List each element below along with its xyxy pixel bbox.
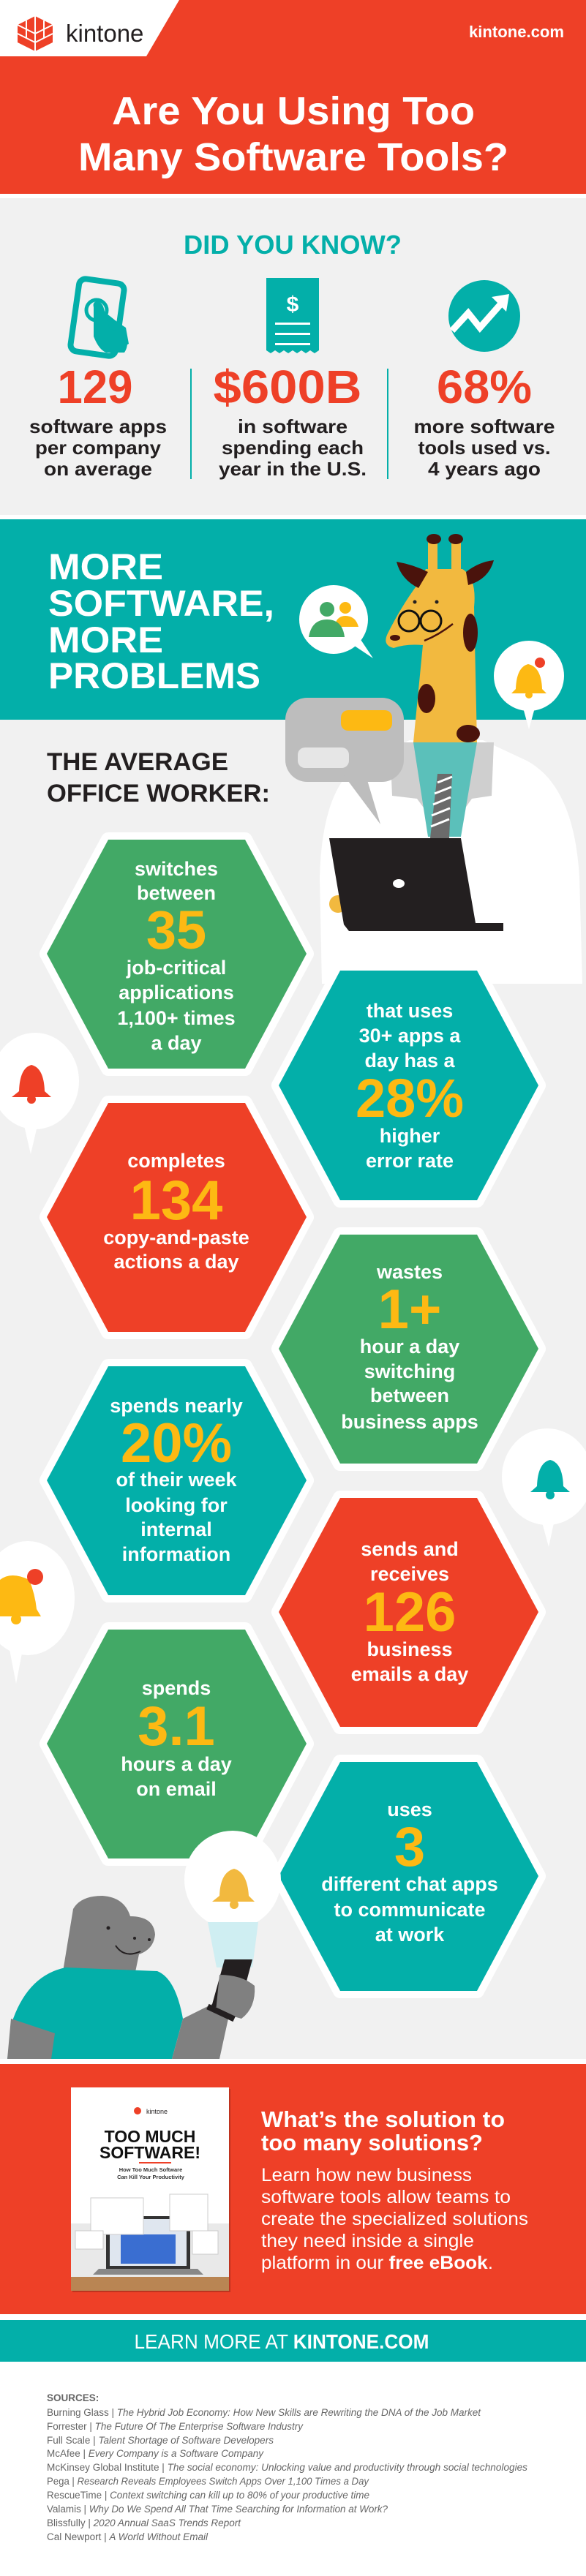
sources: RescueTime | Context switching can kill up to 80% of your productive time: [47, 2490, 369, 2501]
hex 2: 28% error: that uses: [367, 1000, 453, 1022]
logo: kintone: [18, 16, 143, 51]
illustration: giraffe office worker: [320, 534, 582, 984]
ebook cover: TOO MUCH: [105, 2127, 195, 2146]
hex 4: 1+ hour: 1+: [378, 1278, 441, 1341]
hex 8: 3 chat apps: to communicate: [334, 1899, 486, 1921]
icon: red bell bubble: [0, 1033, 79, 1154]
stat: 129 apps: per company: [35, 437, 162, 459]
hex 7: 3.1 hours: on email: [136, 1778, 217, 1800]
panel: ebook CTA: [0, 2059, 586, 2314]
heading: more software more problems: MORE: [48, 546, 163, 587]
hex 4: 1+ hour: hour a day: [360, 1336, 459, 1357]
hex 4: 1+ hour: wastes: [376, 1261, 443, 1283]
stat: 129 apps: on average: [44, 458, 152, 480]
hex 5: 20% week: spends nearly: [110, 1395, 243, 1417]
CTA body: they need inside a single: [261, 2231, 474, 2251]
hex 2: 28% error: error rate: [366, 1150, 454, 1172]
icon: bell bubble top right: [494, 641, 564, 729]
stat: $600B: year in the U.S.: [219, 458, 367, 480]
head: [60, 1896, 155, 1989]
stat: 129 apps: 129: [57, 361, 133, 413]
sources: McKinsey Global Institute | The social economy: Unlocking value and productivity through social technologies: [47, 2462, 527, 2473]
hex 2: 28% error: 28%: [356, 1068, 464, 1129]
stat: $600B: [214, 278, 367, 480]
heading: more software more problems: MORE: [48, 619, 163, 660]
hex 7: 3.1 hours: spends: [142, 1677, 211, 1699]
shirt: [7, 1967, 183, 2059]
stat: 68%: [414, 280, 555, 480]
ebook cover: Can Kill Your Productivity: [117, 2174, 185, 2180]
neck and head: [386, 569, 477, 742]
hex 1: 35 apps: between: [137, 882, 216, 904]
hex 5: 20% week: [47, 1366, 307, 1595]
sources: Cal Newport | A World Without Email: [47, 2531, 209, 2542]
heading: more software more problems: [48, 546, 274, 696]
stat: 68%: tools used vs.: [418, 437, 550, 459]
sources: SOURCES:: [47, 2392, 99, 2403]
CTA body: [261, 2165, 528, 2273]
hex 4: 1+ hour: business apps: [341, 1411, 478, 1433]
logo: kintone: kintone: [66, 20, 143, 47]
ebook cover: kintone: [146, 2108, 168, 2115]
laptop: [329, 895, 347, 913]
icon: growth chart: [448, 280, 520, 352]
title: Are You Using Too: [112, 89, 475, 133]
heading: the average office worker: OFFICE WORKER:: [47, 780, 270, 807]
hex 5: 20% week: of their week: [116, 1469, 238, 1491]
sources: Valamis | Why Do We Spend All That Time Searching for Information at Work?: [47, 2504, 388, 2515]
hex 8: 3 chat apps: uses: [387, 1799, 432, 1820]
banner: learn more: LEARN MORE AT KINTONE.COM: [135, 2330, 429, 2353]
heading: did you know: DID YOU KNOW?: [184, 230, 402, 260]
title: Many Software Tools?: [78, 135, 508, 179]
sources: McAfee | Every Company is a Software Company: [47, 2448, 264, 2459]
icon: phone tap: [70, 278, 129, 357]
hex 6: 126 emails: 126: [364, 1581, 456, 1643]
heading: more software more problems: SOFTWARE,: [48, 583, 274, 624]
CTA heading: What’s the solution to: [261, 2106, 505, 2132]
hex 5: 20% week: internal: [140, 1518, 212, 1540]
hex 7: 3.1 hours: [47, 1630, 307, 1858]
sources: [47, 2392, 527, 2542]
ebook cover: How Too Much Software: [119, 2166, 182, 2173]
icon: people speech bubble: [299, 585, 373, 658]
hex 1: 35 apps: 1,100+ times: [117, 1007, 236, 1029]
sources: Pega | Research Reveals Employees Switch Apps Over 1,100 Times a Day: [47, 2476, 369, 2487]
hex 6: 126 emails: receives: [370, 1563, 449, 1585]
header band: [0, 0, 586, 198]
sources: Burning Glass | The Hybrid Job Economy: How New Skills are Rewriting the DNA of the Job Market: [47, 2407, 481, 2418]
hex 1: 35 apps: 35: [146, 900, 206, 960]
icon: receipt: [266, 278, 319, 353]
hex 1: 35 apps: switches: [135, 858, 218, 880]
icon: yellow bell bubble left: [0, 1541, 75, 1684]
hex 7: 3.1 hours: 3.1: [138, 1695, 215, 1758]
stat: $600B: $600B: [214, 361, 361, 413]
hex 6: 126 emails: [279, 1498, 538, 1727]
icon: receipt: $: [287, 293, 299, 317]
stat: 68%: more software: [414, 415, 555, 437]
stat: 68%: 68%: [437, 361, 532, 413]
CTA heading: [261, 2106, 505, 2155]
hex 6: 126 emails: sends and: [361, 1538, 459, 1560]
stat: 129 apps: software apps: [29, 415, 167, 437]
hex 3: 134 copy paste: [47, 1103, 307, 1332]
hex 2: 28% error: 30+ apps a: [359, 1025, 461, 1047]
hex 2: 28% error: [279, 971, 538, 1200]
hex 5: 20% week: information: [122, 1543, 230, 1565]
hex 1: 35 apps: [47, 840, 307, 1069]
hex 3: 134 copy paste: copy-and-paste: [103, 1227, 249, 1249]
stat: 68%: 4 years ago: [428, 458, 541, 480]
panel: more software band: [0, 515, 586, 720]
hex 8: 3 chat apps: at work: [375, 1924, 445, 1946]
hex 4: 1+ hour: switching: [364, 1360, 455, 1382]
hex 8: 3 chat apps: [279, 1762, 538, 1991]
hex 3: 134 copy paste: completes: [127, 1150, 225, 1172]
hex 8: 3 chat apps: 3: [394, 1816, 425, 1878]
hex 4: 1+ hour: [279, 1235, 538, 1464]
CTA body: platform in our free eBook.: [261, 2253, 493, 2273]
title: [78, 89, 508, 179]
sources: Blissfully | 2020 Annual SaaS Trends Report: [47, 2517, 241, 2528]
hex 3: 134 copy paste: actions a day: [113, 1251, 239, 1273]
sources: Full Scale | Talent Shortage of Software Developers: [47, 2435, 274, 2446]
ebook cover: SOFTWARE!: [99, 2143, 200, 2162]
hex 4: 1+ hour: between: [370, 1385, 449, 1406]
stat: 129 apps: [29, 278, 167, 480]
phone and hand: [211, 1959, 252, 2008]
icon: grey chat bubble: [285, 698, 404, 824]
stat: $600B: in software: [238, 415, 348, 437]
CTA body: software tools allow teams to: [261, 2187, 511, 2207]
hex 1: 35 apps: applications: [119, 982, 234, 1003]
hex 5: 20% week: 20%: [121, 1412, 232, 1475]
hex 6: 126 emails: business: [367, 1638, 453, 1660]
CTA heading: too many solutions?: [261, 2130, 483, 2155]
CTA body: Learn how new business: [261, 2165, 472, 2185]
ebook cover: [71, 2087, 230, 2292]
stat: $600B: spending each: [222, 437, 364, 459]
heading: more software more problems: PROBLEMS: [48, 655, 260, 696]
hex 6: 126 emails: emails a day: [351, 1663, 468, 1685]
hex 5: 20% week: looking for: [125, 1494, 228, 1516]
bell bubble: [184, 1831, 281, 1929]
coat: [320, 740, 582, 984]
heading: the average office worker: [47, 748, 270, 807]
banner: learn more: [0, 2314, 586, 2362]
hex 7: 3.1 hours: hours a day: [121, 1753, 232, 1775]
CTA body: create the specialized solutions: [261, 2209, 528, 2229]
hex 1: 35 apps: a day: [151, 1032, 202, 1054]
illustration: hippo with phone: [7, 1831, 281, 2059]
hex 2: 28% error: day has a: [364, 1050, 456, 1072]
icon: teal bell bubble: [502, 1428, 586, 1547]
hex 2: 28% error: higher: [380, 1125, 440, 1147]
hex 3: 134 copy paste: 134: [130, 1170, 222, 1232]
hex 8: 3 chat apps: different chat apps: [321, 1873, 498, 1895]
hex 1: 35 apps: job-critical: [126, 957, 226, 979]
heading: the average office worker: THE AVERAGE: [47, 748, 228, 776]
site url: kintone.com: [469, 23, 564, 41]
sources: Forrester | The Future Of The Enterprise Software Industry: [47, 2421, 304, 2432]
